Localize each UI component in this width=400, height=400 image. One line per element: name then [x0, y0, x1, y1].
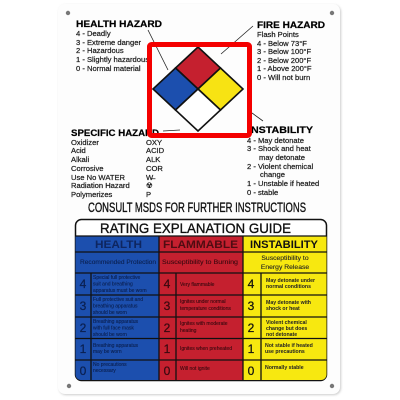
specific hazard block: SPECIFIC HAZARD	[71, 128, 160, 138]
flammable column	[159, 236, 243, 380]
table frame	[76, 220, 326, 380]
blue health quadrant	[153, 68, 198, 110]
icon: bottom left screw	[67, 384, 71, 388]
specific hazard block: Polymerizes	[71, 190, 113, 199]
specific hazard block: ☢	[146, 181, 153, 190]
white special quadrant	[176, 89, 220, 131]
specific hazard block: P	[146, 190, 151, 199]
instability block	[247, 125, 319, 197]
instability column: 1	[248, 342, 255, 356]
table grid	[75, 236, 327, 380]
instability block: change	[260, 170, 285, 179]
flammable column: 0	[164, 364, 171, 378]
health hazard block: 4 - Deadly	[76, 29, 111, 38]
flammable column: Ignites when preheated	[180, 346, 232, 352]
fire hazard block: 3 - Below 100°F	[257, 47, 311, 56]
flammable column: 4	[164, 277, 171, 291]
fire hazard block: 4 - Below 73°F	[257, 39, 307, 48]
flammable column: 1	[164, 342, 171, 356]
flammable column: Will not ignite	[180, 366, 210, 372]
specific hazard block: ALK	[146, 155, 160, 164]
instability column: change but does	[266, 326, 307, 332]
specific hazard block: W̶	[146, 173, 156, 182]
NFPA diamond	[153, 47, 243, 131]
instability column: not detonate	[266, 332, 297, 338]
health hazard block: 3 - Extreme danger	[76, 38, 141, 47]
health column: 3	[80, 299, 87, 313]
health column: breathing apparatus	[93, 304, 138, 310]
instability block: 3 - Shock and heat	[247, 144, 312, 153]
instability column: Energy Release	[261, 264, 309, 271]
instability block: INSTABILITY	[248, 125, 313, 135]
instability column: May detonate under	[266, 278, 315, 284]
flammable column: 2	[164, 321, 171, 335]
health column: Recommended Protection	[80, 259, 157, 266]
instability column: shock or heat	[266, 306, 300, 312]
instability column: 4	[248, 277, 255, 291]
flammable column: FLAMMABLE	[163, 239, 238, 251]
instability block: 0 - stable	[247, 188, 278, 197]
health column: necessary	[93, 368, 116, 374]
yellow instability quadrant	[198, 68, 243, 110]
health hazard block: 0 - Normal material	[76, 64, 141, 73]
fire hazard block	[257, 20, 326, 82]
health column: 1	[80, 342, 87, 356]
instability column: May detonate with	[266, 300, 311, 306]
instability column: Normally stable	[265, 365, 304, 371]
flammable column: temperature conditions	[180, 306, 231, 312]
icon: bottom right screw	[330, 384, 334, 388]
fire hazard block: 1 - Above 200°F	[257, 64, 312, 73]
instability block: 4 - May detonate	[247, 136, 304, 145]
health column: No precautions	[93, 362, 127, 368]
health column: 4	[80, 277, 87, 291]
specific hazard block: OXY	[146, 138, 162, 147]
health column: 2	[80, 321, 87, 335]
health column: should be worn	[93, 332, 127, 338]
red highlight frame	[150, 44, 250, 136]
instability column: INSTABILITY	[250, 239, 319, 251]
sign board	[58, 4, 341, 395]
specific hazard block	[71, 128, 165, 199]
instability column: 2	[248, 321, 255, 335]
instability column: normal conditions	[266, 284, 311, 290]
health hazard block: 1 - Slightly hazardous	[76, 55, 149, 64]
instability column: 0	[248, 364, 255, 378]
flammable column: Very flammable	[180, 282, 215, 288]
instability block: 1 - Unstable if heated	[247, 179, 319, 188]
health column: 0	[80, 364, 87, 378]
health column: Breathing apparatus	[93, 343, 139, 349]
specific hazard block: Acid	[71, 146, 86, 155]
fire hazard block: Flash Points	[257, 30, 299, 39]
consult MSDS heading: CONSULT MSDS FOR FURTHER INSTRUCTIONS	[88, 200, 306, 215]
specific hazard block: ACID	[146, 146, 165, 155]
health column: Special full protective	[93, 275, 140, 281]
health hazard block: 2 - Hazardous	[76, 46, 124, 55]
rating explanation guide table	[75, 220, 327, 380]
instability column: Violent chemical	[266, 320, 307, 326]
health column: may be worn	[93, 349, 122, 355]
fire hazard block: FIRE HAZARD	[257, 20, 326, 30]
health column: should be worn	[93, 310, 127, 316]
icon: top right screw	[330, 11, 334, 15]
icon: top left screw	[66, 11, 70, 15]
health hazard block	[76, 19, 163, 73]
instability block: 2 - Violent chemical	[247, 162, 313, 171]
specific hazard block: Alkali	[71, 155, 89, 164]
health column: suit and breathing	[93, 282, 133, 288]
health column: Breathing apparatus	[93, 319, 139, 325]
instability column: use precautions	[265, 349, 305, 355]
fire hazard block: 2 - Below 200°F	[257, 56, 311, 65]
flammable column: Ignites with moderate	[180, 321, 228, 327]
instability column: 3	[248, 299, 255, 313]
specific hazard block: Radiation Hazard	[71, 181, 130, 190]
leader lines	[148, 26, 263, 131]
red flammability quadrant	[176, 47, 220, 89]
flammable column: Susceptibility to Burning	[162, 259, 239, 266]
health hazard block: HEALTH HAZARD	[76, 19, 163, 29]
table title: RATING EXPLANATION GUIDE	[100, 220, 291, 236]
fire hazard block: 0 - Will not burn	[257, 73, 310, 82]
instability column	[243, 236, 326, 380]
specific hazard block: COR	[146, 164, 163, 173]
specific hazard block: Corrosive	[71, 164, 104, 173]
flammable column: 3	[164, 299, 171, 313]
health column: with full face mask	[93, 326, 134, 332]
specific hazard block: Oxidizer	[71, 138, 99, 147]
specific hazard block: Use No WATER	[71, 173, 126, 182]
flammable column: Ignites under normal	[180, 299, 226, 305]
health column: HEALTH	[95, 239, 142, 251]
health column: Full protective suit and	[93, 297, 143, 303]
instability block: may detonate	[259, 153, 305, 162]
flammable column: heating	[180, 328, 197, 334]
instability column: Susceptibility to	[261, 255, 309, 262]
health column: apparatus must be worn	[93, 288, 147, 294]
instability column: Not stable if heated	[265, 343, 313, 349]
health column	[76, 236, 159, 380]
